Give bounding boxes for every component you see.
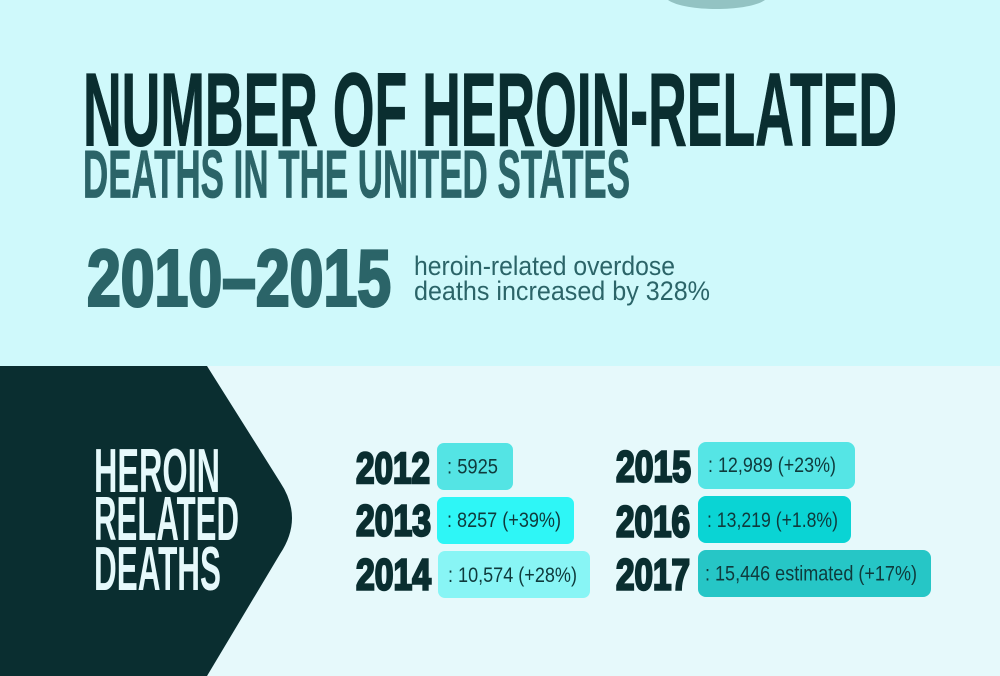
date range: 2010–2015: [87, 234, 391, 322]
row: 2012: [356, 443, 513, 493]
row: 2013: 2013: [356, 496, 431, 546]
row: 2012: 2012: [356, 444, 430, 493]
arrow heading: HEROIN: [94, 437, 220, 506]
row: 2017: 2017: [616, 550, 690, 600]
row: 2014: : 10,574 (+28%): [448, 564, 577, 587]
partial grey circle at top edge: [668, 0, 765, 9]
arrow panel: heroin related deaths: [0, 366, 292, 676]
row: 2015: : 12,989 (+23%): [708, 454, 836, 477]
arrow heading: DEATHS: [94, 535, 221, 604]
row: 2016: 2016: [616, 498, 690, 546]
row: 2013: : 8257 (+39%): [447, 509, 561, 532]
title: [83, 52, 897, 212]
row: 2016: [616, 496, 851, 546]
row: 2017: [616, 550, 931, 600]
row: 2013: [356, 496, 574, 546]
row: 2012: : 5925: [447, 456, 498, 478]
top panel background: [0, 0, 1000, 366]
row: 2016: : 13,219 (+1.8%): [707, 509, 838, 532]
row: 2015: 2015: [616, 442, 691, 492]
bottom panel background: [0, 366, 1000, 676]
row: 2017: : 15,446 estimated (+17%): [705, 562, 917, 586]
row: 2015: [616, 442, 855, 492]
overdose statistic text: heroin-related overdose: [414, 251, 675, 281]
row: 2014: 2014: [356, 550, 431, 600]
overdose statistic text: [414, 251, 710, 306]
arrow heading: [94, 437, 239, 604]
overdose statistic text: deaths increased by 328%: [414, 276, 710, 306]
arrow heading: RELATED: [94, 485, 239, 554]
row: 2014: [356, 550, 590, 600]
